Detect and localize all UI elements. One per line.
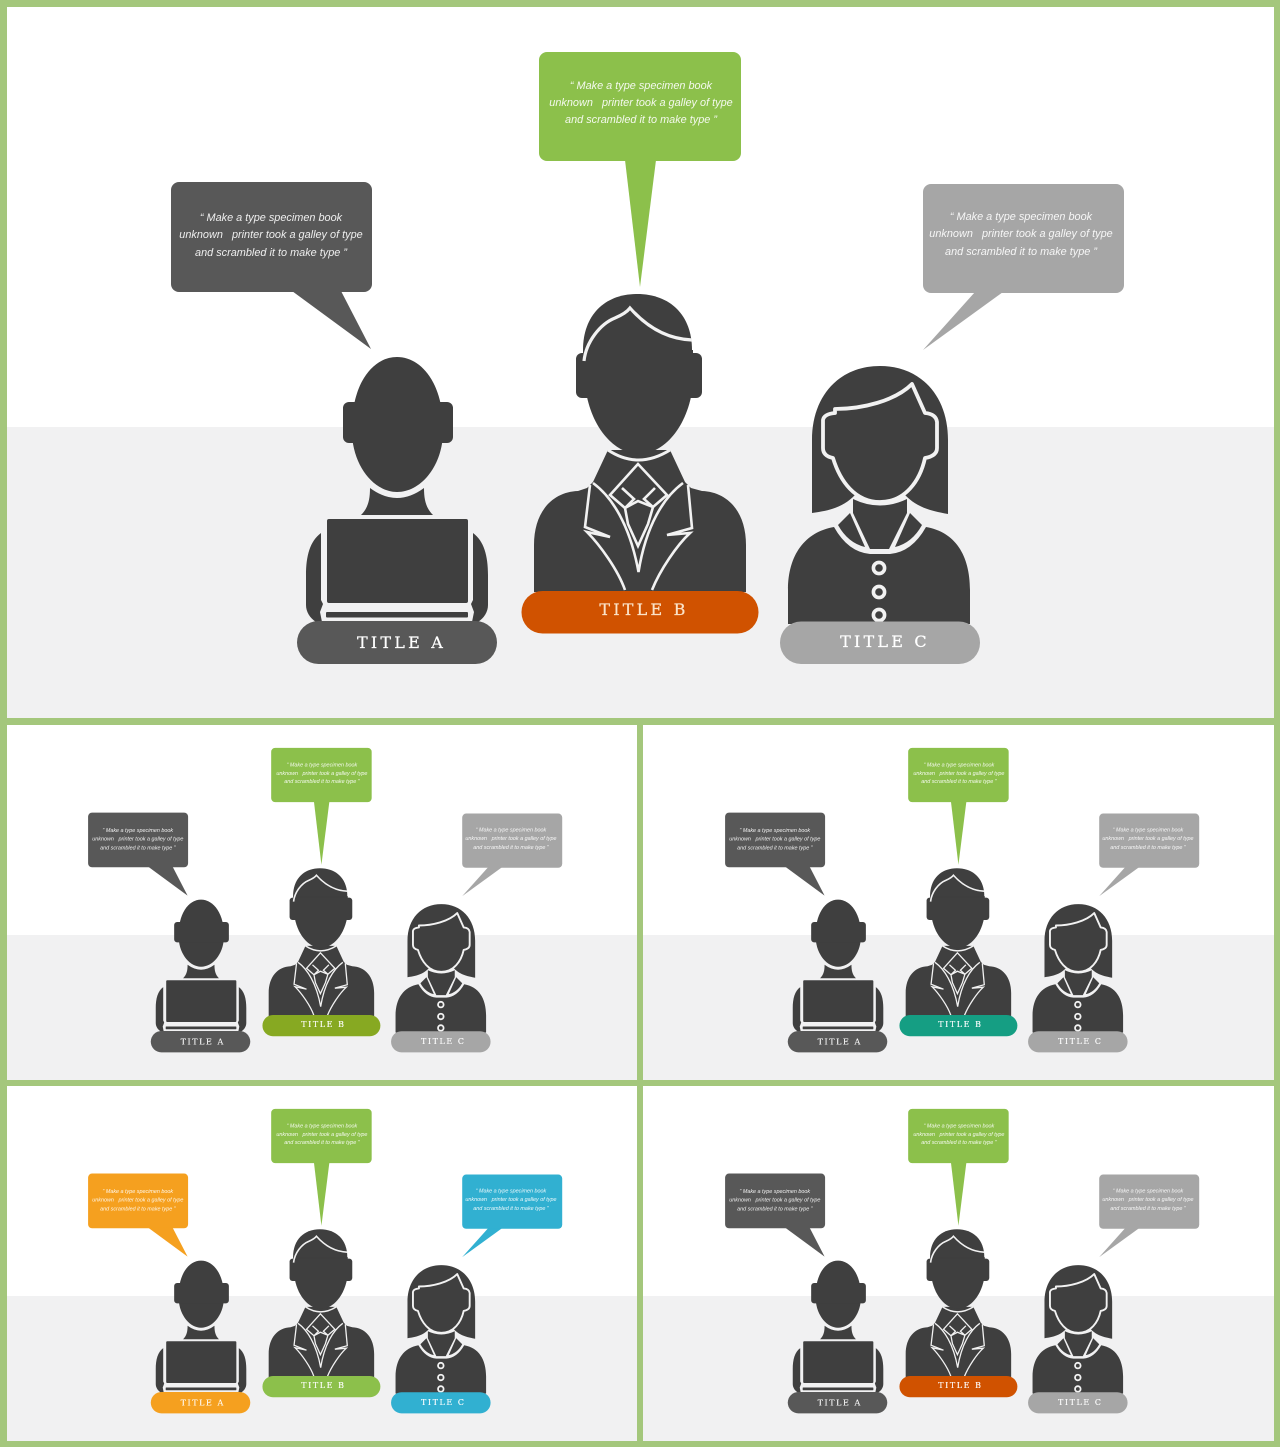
bubble B <box>271 748 372 865</box>
bubble C: and scrambled it to make type ” <box>1110 1206 1186 1212</box>
pill B: TITLE B <box>301 1381 346 1390</box>
person B in suit <box>534 294 746 592</box>
bubble C <box>1099 814 1199 896</box>
pill A <box>788 1031 887 1052</box>
bubble A: unknown printer took a galley of type <box>729 836 820 842</box>
person B <box>906 1229 1011 1378</box>
bubble C: unknown printer took a galley of type <box>465 1197 556 1203</box>
bubble A: unknown printer took a galley of type <box>729 1197 820 1203</box>
bubble B: unknown printer took a galley of type <box>913 771 1004 777</box>
bubble A <box>88 1174 188 1257</box>
person A <box>156 900 246 1031</box>
speech bubble C: and scrambled it to make type ” <box>945 246 1098 258</box>
bubble A: unknown printer took a galley of type <box>92 836 183 842</box>
person C <box>396 1265 486 1393</box>
pill A: TITLE A <box>181 1037 225 1046</box>
pill C <box>1028 1392 1128 1413</box>
speech bubble A: “ Make a type specimen book <box>200 212 343 224</box>
speech bubble A: unknown printer took a galley of type <box>179 229 363 241</box>
bubble B: “ Make a type specimen book <box>287 762 358 768</box>
bubble C <box>1099 1175 1199 1257</box>
speech bubble B: unknown printer took a galley of type <box>549 97 733 109</box>
title pill B: TITLE B <box>599 600 689 619</box>
title pill C <box>780 622 980 664</box>
pill A <box>788 1392 887 1413</box>
pill C: TITLE C <box>421 1398 466 1407</box>
person B <box>269 868 374 1017</box>
speech bubble B: and scrambled it to make type ” <box>565 114 718 126</box>
person B <box>906 868 1011 1017</box>
title pill B <box>522 591 758 634</box>
bubble B: unknown printer took a galley of type <box>913 1132 1004 1138</box>
panel: main scene <box>7 7 1274 718</box>
panel: variant 4 <box>643 1086 1274 1441</box>
bubble C: and scrambled it to make type ” <box>473 1206 549 1212</box>
speech bubble A <box>171 182 372 349</box>
speech bubble B: “ Make a type specimen book <box>570 80 713 92</box>
bubble C: “ Make a type specimen book <box>476 1188 547 1194</box>
pill A <box>151 1031 250 1052</box>
pill C <box>391 1031 491 1052</box>
bubble B <box>908 748 1009 865</box>
speech bubble A: and scrambled it to make type ” <box>195 247 348 259</box>
pill A <box>151 1392 250 1413</box>
pill B <box>262 1376 380 1397</box>
person A with laptop <box>306 357 488 622</box>
bubble B: unknown printer took a galley of type <box>276 1132 367 1138</box>
bubble C: unknown printer took a galley of type <box>1102 1197 1193 1203</box>
bubble A: “ Make a type specimen book <box>740 828 810 834</box>
bubble B <box>908 1109 1009 1226</box>
panel: variant 3 <box>7 1086 637 1441</box>
speech bubble C: unknown printer took a galley of type <box>929 228 1113 240</box>
bubble A <box>725 1174 825 1257</box>
person C woman <box>788 366 970 624</box>
variant 3 scene <box>88 1109 562 1413</box>
bubble C <box>462 1175 562 1257</box>
bubble C: unknown printer took a galley of type <box>1102 836 1193 842</box>
pill B: TITLE B <box>938 1020 983 1029</box>
bubble B: and scrambled it to make type ” <box>921 779 997 785</box>
bubble A: “ Make a type specimen book <box>103 1189 173 1195</box>
speech bubble C: “ Make a type specimen book <box>950 211 1093 223</box>
pill C <box>1028 1031 1128 1052</box>
person B <box>269 1229 374 1378</box>
title pill C: TITLE C <box>840 632 930 651</box>
pill B <box>262 1015 380 1036</box>
person C <box>1033 904 1123 1032</box>
bubble B <box>271 1109 372 1226</box>
panel: variant 1 <box>7 725 637 1080</box>
bubble A: and scrambled it to make type ” <box>100 1206 176 1212</box>
speech bubble B <box>539 52 741 287</box>
person A <box>156 1261 246 1392</box>
bubble B: and scrambled it to make type ” <box>284 1140 360 1146</box>
bubble A <box>88 813 188 896</box>
bubble A <box>725 813 825 896</box>
bubble A: and scrambled it to make type ” <box>737 1206 813 1212</box>
bubble B: “ Make a type specimen book <box>924 762 995 768</box>
bubble B: unknown printer took a galley of type <box>276 771 367 777</box>
bubble A: “ Make a type specimen book <box>103 828 173 834</box>
pill A: TITLE A <box>818 1037 862 1046</box>
pill A: TITLE A <box>181 1398 225 1407</box>
bubble B: “ Make a type specimen book <box>924 1123 995 1129</box>
bubble C: “ Make a type specimen book <box>1113 827 1184 833</box>
person C <box>1033 1265 1123 1393</box>
pill B: TITLE B <box>938 1381 983 1390</box>
bubble A: “ Make a type specimen book <box>740 1189 810 1195</box>
bubble C: “ Make a type specimen book <box>476 827 547 833</box>
bubble C: and scrambled it to make type ” <box>473 845 549 851</box>
bubble B: and scrambled it to make type ” <box>921 1140 997 1146</box>
bubble C: “ Make a type specimen book <box>1113 1188 1184 1194</box>
person C <box>396 904 486 1032</box>
bubble C: and scrambled it to make type ” <box>1110 845 1186 851</box>
bubble A: and scrambled it to make type ” <box>737 845 813 851</box>
variant 1 scene <box>88 748 562 1052</box>
bubble C <box>462 814 562 896</box>
variant 4 scene <box>725 1109 1199 1413</box>
bubble A: and scrambled it to make type ” <box>100 845 176 851</box>
pill C <box>391 1392 491 1413</box>
pill C: TITLE C <box>1058 1398 1103 1407</box>
variant 2 scene <box>725 748 1199 1052</box>
title pill A <box>297 621 497 664</box>
pill C: TITLE C <box>1058 1037 1103 1046</box>
person A <box>793 1261 883 1392</box>
pill B <box>899 1376 1017 1397</box>
speech bubble C <box>923 184 1124 350</box>
panel: variant 2 <box>643 725 1274 1080</box>
bubble B: and scrambled it to make type ” <box>284 779 360 785</box>
bubble A: unknown printer took a galley of type <box>92 1197 183 1203</box>
bubble B: “ Make a type specimen book <box>287 1123 358 1129</box>
pill A: TITLE A <box>818 1398 862 1407</box>
bubble C: unknown printer took a galley of type <box>465 836 556 842</box>
pill B: TITLE B <box>301 1020 346 1029</box>
person A <box>793 900 883 1031</box>
pill B <box>899 1015 1017 1036</box>
pill C: TITLE C <box>421 1037 466 1046</box>
title pill A: TITLE A <box>357 633 446 652</box>
